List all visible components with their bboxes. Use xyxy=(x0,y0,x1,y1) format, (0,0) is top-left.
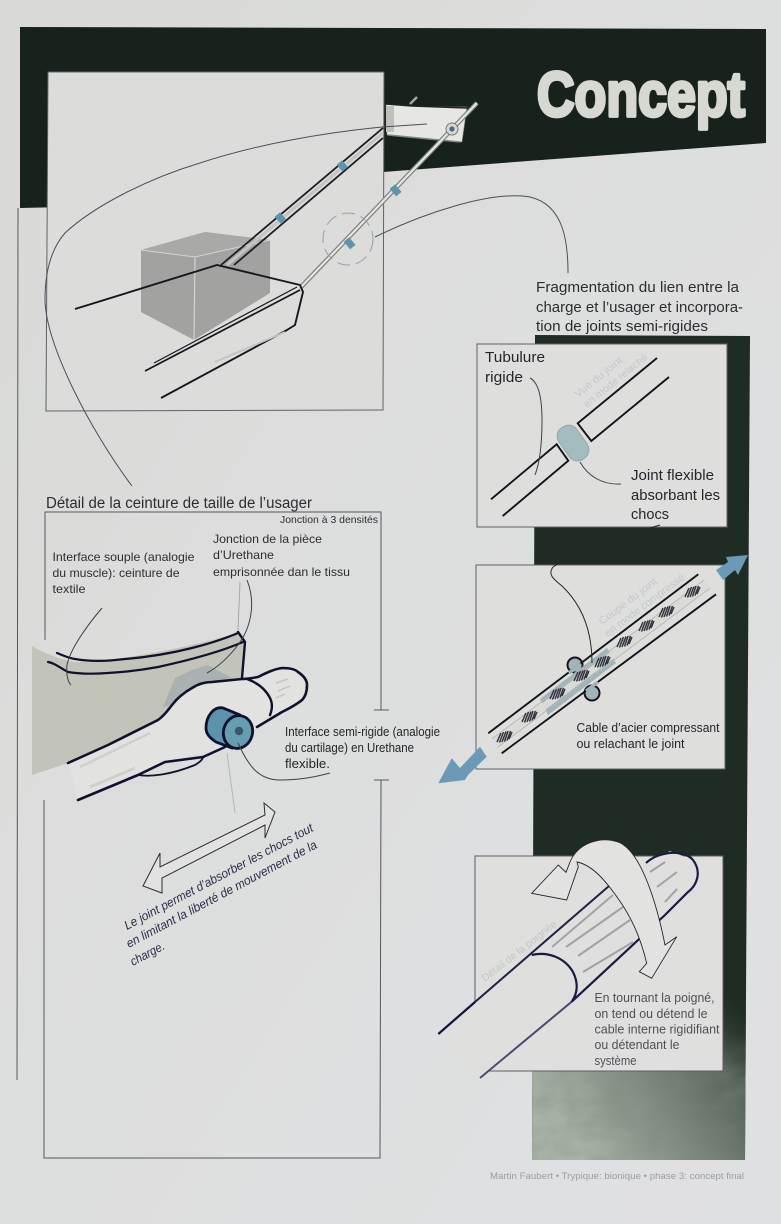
upper strap xyxy=(221,128,383,265)
heading: fragmentation: charge et l’usager et incorpora- xyxy=(536,300,743,316)
faded panel caption: Coupe du joint xyxy=(597,576,660,627)
heading: fragmentation: Fragmentation du lien entre la xyxy=(536,280,740,296)
label: urethane junction: d’Urethane xyxy=(213,548,274,562)
footer credit: Martin Faubert • Trypique: bionique • phase 3: concept final xyxy=(490,1171,744,1182)
left margin line xyxy=(17,208,18,1080)
label: ou détendant le xyxy=(594,1038,680,1052)
section: steel cable xyxy=(492,580,710,747)
label: urethane junction xyxy=(213,532,350,579)
label: semi-rigid interface xyxy=(285,725,440,771)
callout curve to waist detail xyxy=(45,124,427,486)
label: En tournant la poigné, xyxy=(594,991,714,1005)
heading: fragmentation: tion de joints semi-rigides xyxy=(536,319,708,335)
rotated note on shock absorption: en limitant la liberté de mouvement de la xyxy=(124,838,319,951)
labels xyxy=(485,349,720,523)
label: semi-rigid interface: flexible. xyxy=(285,757,330,771)
arrow: rotation of handle xyxy=(532,840,677,978)
label: ou relachant le joint xyxy=(576,737,685,751)
panel: joint section, compressed xyxy=(476,525,725,769)
panel: handle detail xyxy=(438,840,723,1078)
dark textured column xyxy=(525,335,755,1165)
header band xyxy=(20,27,766,208)
panel: overall concept illustration xyxy=(46,72,477,411)
rotated note on shock absorption: charge. xyxy=(128,939,167,969)
labels: chocs xyxy=(631,507,669,523)
labels: Joint flexible xyxy=(631,468,714,484)
arrow: double-headed movement xyxy=(143,803,275,893)
label: soft interface: textile xyxy=(52,582,86,596)
label: soft interface: Interface souple (analogie xyxy=(52,550,195,564)
panel frame: waist belt detail xyxy=(44,512,389,1158)
heading: waist belt detail: Détail de la ceinture de taille de l’usager xyxy=(46,495,312,512)
label: Cable d’acier compressant xyxy=(576,721,720,735)
label: on tend ou détend le xyxy=(594,1007,708,1021)
section: joint body xyxy=(540,648,616,715)
callout curve to joint detail xyxy=(375,196,568,273)
belt fabric xyxy=(32,633,245,775)
waist belt xyxy=(75,265,303,398)
label xyxy=(594,991,720,1068)
rotated note on shock absorption: Le joint permet d’absorber les chocs tout xyxy=(122,821,316,933)
handle tube xyxy=(438,851,698,1078)
label: cable interne rigidifiant xyxy=(594,1022,720,1036)
labels: Tubulure xyxy=(485,349,545,366)
label: three densities: Jonction à 3 densités xyxy=(280,514,378,526)
section: tube walls xyxy=(488,574,716,753)
label: semi-rigid interface: du cartilage) en Urethane xyxy=(285,741,414,755)
label: soft interface xyxy=(52,550,195,596)
dashed circle around joint xyxy=(323,213,373,265)
label: urethane junction: Jonction de la pièce xyxy=(213,532,322,546)
rigid tubes xyxy=(491,358,669,516)
faded panel caption: en mode relaché xyxy=(581,351,650,410)
labels: absorbant les xyxy=(631,488,720,504)
label: urethane junction: emprisonnée dan le tissu xyxy=(213,565,350,579)
shoulder piece xyxy=(386,97,467,142)
grip lines xyxy=(552,862,677,972)
label: soft interface: du muscle): ceinture de xyxy=(52,566,180,580)
faded panel caption: Vue du joint xyxy=(572,354,625,400)
label: semi-rigid interface: Interface semi-rigide (analogie xyxy=(285,725,440,739)
end cap shading xyxy=(80,679,290,787)
icon: urethane cylinder joint xyxy=(206,708,256,752)
panel: joint view, relaxed xyxy=(477,344,727,527)
callout line xyxy=(551,525,660,663)
belt seams and outlines xyxy=(48,632,307,800)
arrow: upper right tension xyxy=(716,555,748,580)
section: joint openings over the walls xyxy=(569,664,598,691)
arm piece xyxy=(68,668,307,800)
label: système xyxy=(594,1054,637,1068)
flexible joint xyxy=(553,421,593,465)
faded panel caption: Détail de la poignée xyxy=(479,918,559,984)
label xyxy=(576,721,720,751)
callout lines xyxy=(67,580,330,813)
faded panel caption: en mode compressé xyxy=(603,571,687,639)
heading: fragmentation xyxy=(536,280,743,335)
arrow: lower left tension xyxy=(438,747,487,783)
rigid tubing strap xyxy=(301,103,477,287)
illustration: waist belt and urethane joint xyxy=(32,580,330,813)
labels: rigide xyxy=(485,369,523,386)
icon: load box xyxy=(141,232,270,340)
